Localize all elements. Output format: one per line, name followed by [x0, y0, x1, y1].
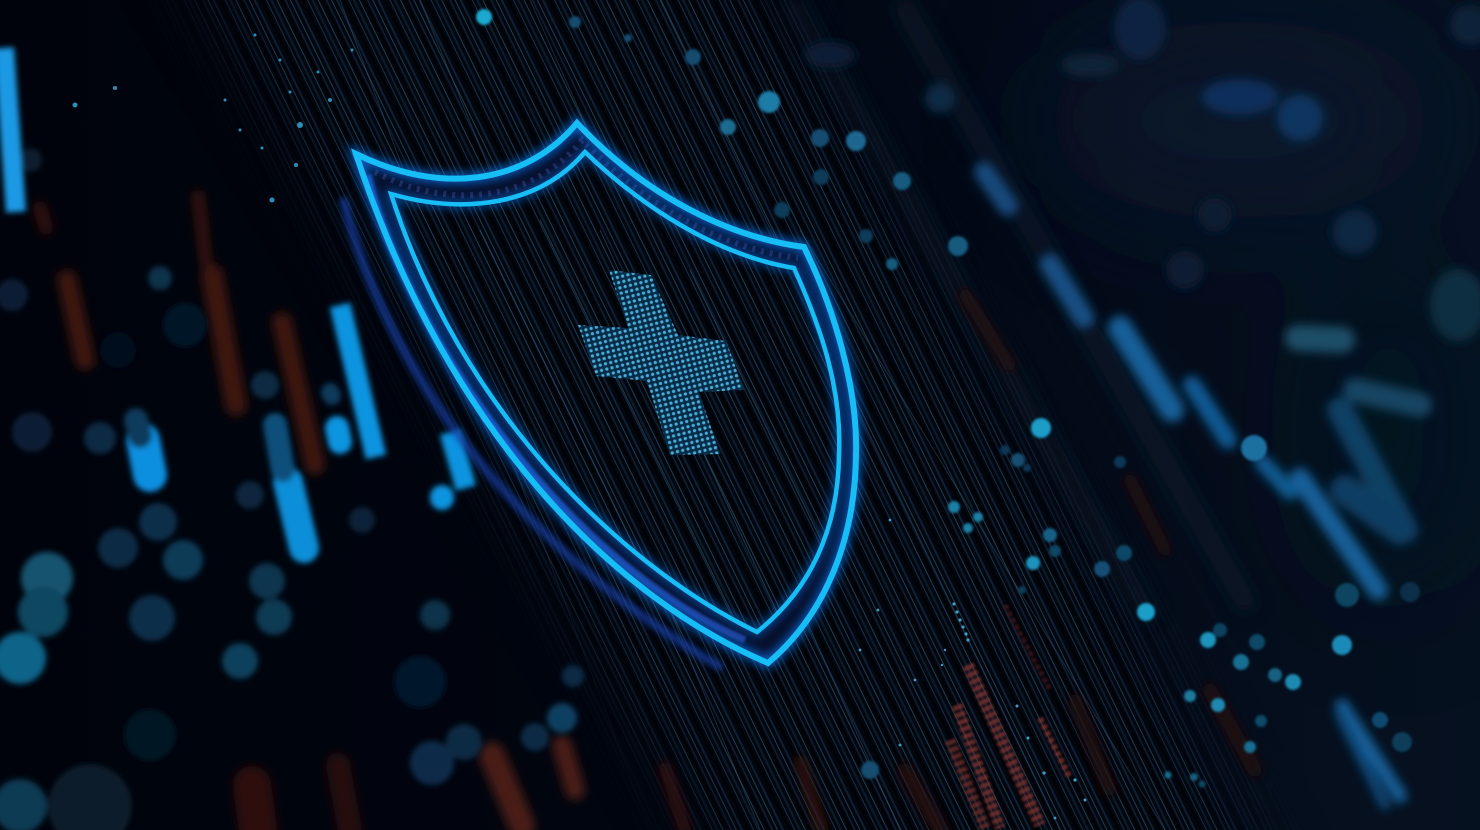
outer outline glow	[356, 123, 856, 663]
shield	[343, 123, 860, 668]
top band speckle	[375, 140, 798, 258]
shield back reflection	[343, 198, 722, 668]
inner outline	[391, 152, 839, 632]
shield band tint	[368, 175, 745, 640]
sparkle dots: lower right field	[861, 418, 1420, 788]
inner outline glow	[391, 152, 839, 632]
fine sparkle pixels	[859, 519, 1086, 819]
outer outline	[356, 123, 856, 663]
shield interior lines	[394, 156, 837, 629]
blurred bars and bokeh: right	[804, 0, 1480, 805]
bokeh circles: left	[0, 148, 584, 830]
sparkle dots: upper field	[476, 9, 968, 270]
left data dots	[72, 34, 354, 202]
blurred wide streaks: right of sharp band	[700, 0, 1250, 680]
medical cross	[578, 270, 744, 455]
red data streaks: textured	[950, 605, 1070, 828]
red data streaks: blurred	[40, 195, 1255, 830]
background glow: top right haze	[1040, 20, 1470, 600]
data lines band	[184, 0, 1272, 830]
shield body fill	[356, 123, 856, 663]
blurred bright bars: left	[4, 48, 466, 548]
